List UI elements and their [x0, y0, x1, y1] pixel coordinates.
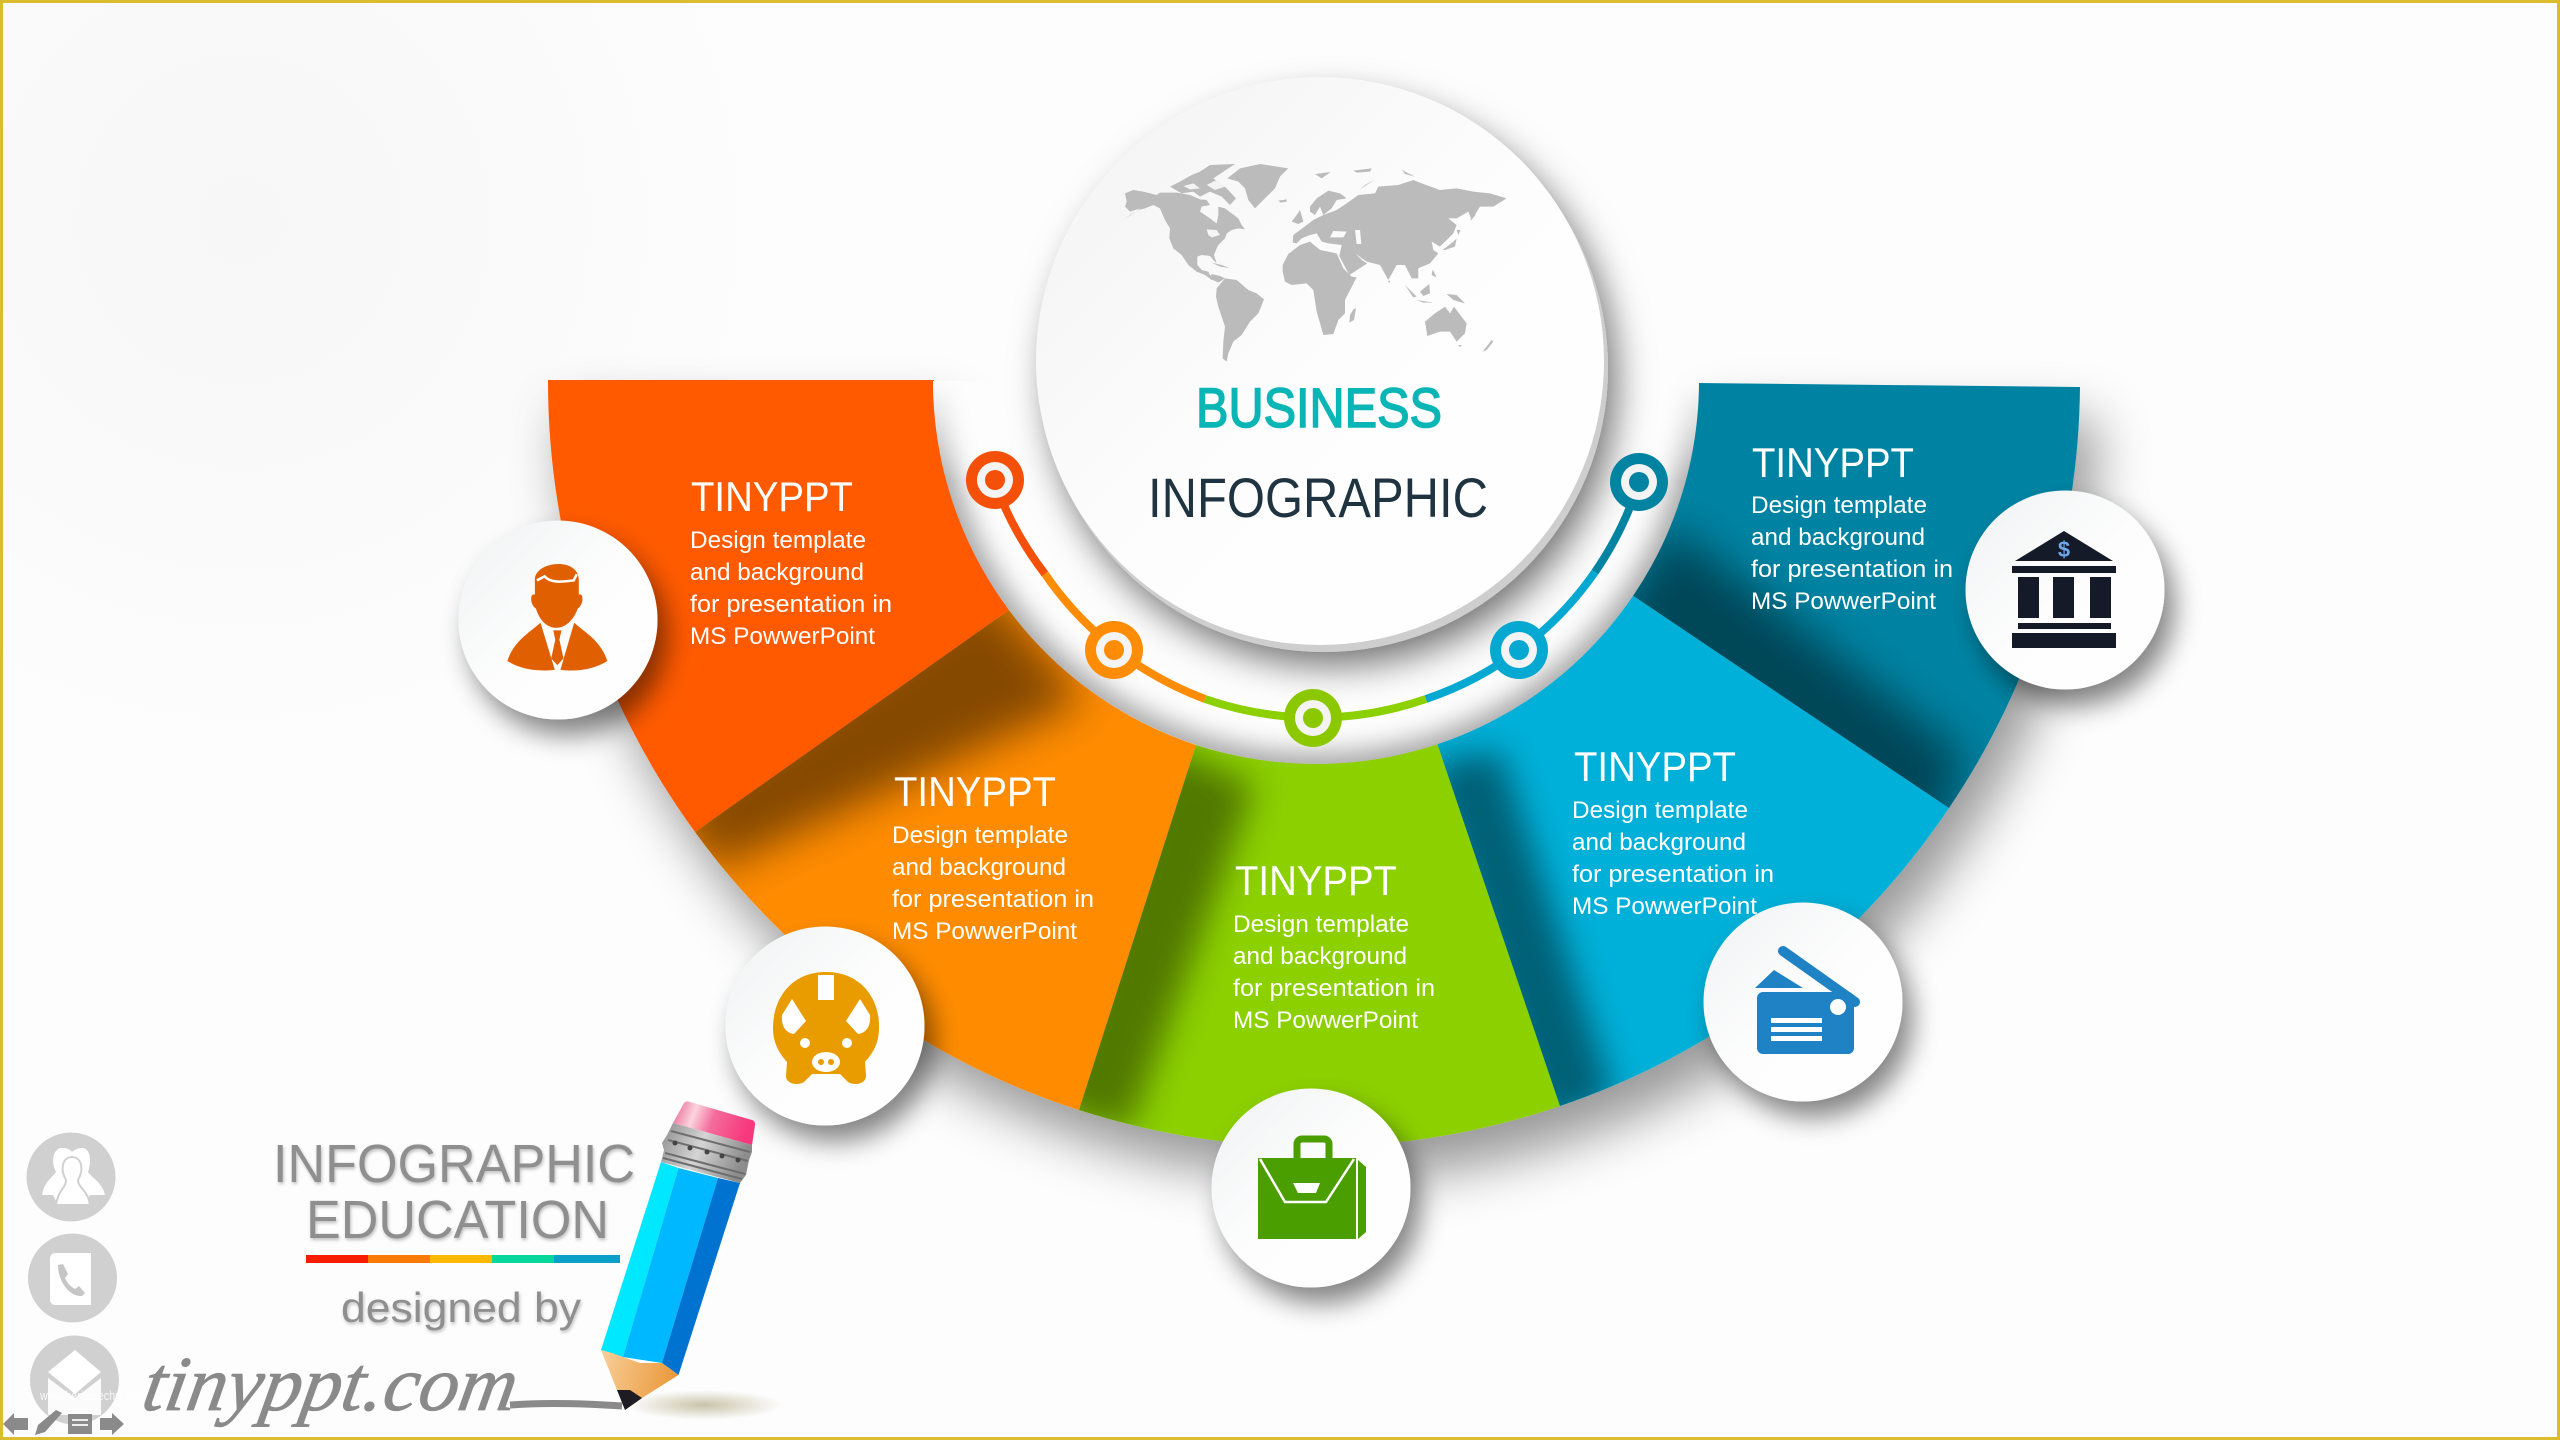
text block: blue segment: TINYPPT	[1574, 743, 1736, 790]
badge: credit card icon	[1704, 902, 1902, 1102]
text block: red segment: for presentation in	[690, 591, 892, 618]
green segment cast shadow	[1045, 745, 1255, 1130]
education logo block	[137, 1134, 635, 1428]
node 2	[1085, 621, 1143, 679]
disc rim	[1040, 84, 1608, 652]
timeline arc with nodes	[966, 451, 1668, 747]
pencil stroke	[510, 1403, 622, 1406]
icon: people	[26, 1132, 116, 1222]
pencil illustration	[601, 1101, 782, 1420]
central globe disc	[1036, 77, 1608, 652]
disc face	[1036, 77, 1604, 645]
text block: orange segment: TINYPPT	[894, 768, 1056, 815]
orange segment cast shadow	[670, 585, 1085, 870]
text block: orange segment: MS PowwerPoint	[892, 918, 1077, 945]
text block: blue segment	[1572, 743, 1774, 920]
control: next arrow	[100, 1413, 124, 1435]
text block: red segment	[690, 473, 892, 650]
text block: teal segment: TINYPPT	[1752, 439, 1914, 486]
text block: orange segment	[892, 768, 1094, 945]
wheel segment shapes with shadow	[548, 380, 2080, 1147]
node 1	[966, 451, 1024, 509]
text block: orange segment: and background	[892, 854, 1066, 881]
world map	[1123, 164, 1507, 362]
europe asia africa oceania	[1283, 168, 1507, 352]
node 5	[1610, 453, 1668, 511]
text block: red segment: MS PowwerPoint	[690, 623, 875, 650]
text block: teal segment: MS PowwerPoint	[1751, 588, 1936, 615]
text block: blue segment: for presentation in	[1572, 861, 1774, 888]
rainbow bar	[306, 1255, 620, 1263]
text block: red segment: TINYPPT	[691, 473, 853, 520]
text block: teal segment: and background	[1751, 524, 1925, 551]
text block: green segment: Design template	[1233, 911, 1409, 938]
badge: bank icon	[1966, 490, 2164, 690]
icon: piggy bank	[773, 972, 879, 1084]
slide navigation controls	[3, 1410, 124, 1435]
title: INFOGRAPHIC: INFOGRAPHIC	[1148, 466, 1488, 529]
text block: orange segment: for presentation in	[892, 886, 1094, 913]
text block: teal segment: Design template	[1751, 492, 1927, 519]
pencil lead	[617, 1390, 642, 1410]
text block: red segment: Design template	[690, 527, 866, 554]
inner white band with shadow	[933, 381, 1699, 764]
text block: teal segment: for presentation in	[1751, 556, 1953, 583]
text block: green segment: TINYPPT	[1235, 857, 1397, 904]
text block: red segment: and background	[690, 559, 864, 586]
text block: blue segment: MS PowwerPoint	[1572, 893, 1757, 920]
text block: orange segment: Design template	[892, 822, 1068, 849]
text block: blue segment: Design template	[1572, 797, 1748, 824]
teal segment cast shadow	[1633, 513, 1982, 808]
icon: briefcase	[1258, 1139, 1366, 1239]
icon: bank: $	[2058, 537, 2070, 562]
text block: green segment: for presentation in	[1233, 975, 1435, 1002]
control: previous arrow	[3, 1413, 28, 1435]
contact icons column	[26, 1132, 200, 1424]
timeline arc segments	[994, 480, 1639, 718]
ferrule	[661, 1123, 752, 1183]
text block: green segment	[1233, 857, 1435, 1034]
text block: blue segment: and background	[1572, 829, 1746, 856]
badge: piggy bank icon	[726, 926, 924, 1126]
heading: EDUCATION: EDUCATION	[306, 1190, 609, 1250]
americas	[1123, 164, 1288, 362]
icon: businessman	[507, 564, 607, 671]
text block: green segment: and background	[1233, 943, 1407, 970]
icon: phone book	[28, 1234, 117, 1322]
ground shadow	[626, 1390, 782, 1420]
pencil body	[601, 1162, 740, 1375]
eraser	[673, 1101, 755, 1145]
faint background glow	[0, 0, 900, 800]
node 4	[1490, 621, 1548, 679]
watermark url: www.heritagechristiancollege.com	[39, 1388, 200, 1403]
icon: envelope	[30, 1336, 119, 1424]
control: notes	[68, 1414, 92, 1434]
heading: INFOGRAPHIC: INFOGRAPHIC	[273, 1134, 635, 1194]
node 3	[1284, 689, 1342, 747]
text block: teal segment	[1751, 439, 1953, 615]
semicircular wheel of five segments	[548, 380, 2080, 1147]
badge: briefcase icon	[1212, 1088, 1410, 1288]
pencil wood tip	[601, 1350, 678, 1410]
badge: person icon	[458, 520, 658, 720]
control: pen	[35, 1410, 62, 1435]
text: tinyppt.com: tinyppt.com	[137, 1342, 525, 1428]
text block: green segment: MS PowwerPoint	[1233, 1007, 1418, 1034]
icon: bank	[2012, 531, 2116, 648]
icon: card	[1755, 951, 1855, 1054]
blue segment cast shadow	[1425, 750, 1615, 1130]
text: designed by: designed by	[341, 1284, 581, 1331]
title: BUSINESS: BUSINESS	[1196, 376, 1442, 439]
